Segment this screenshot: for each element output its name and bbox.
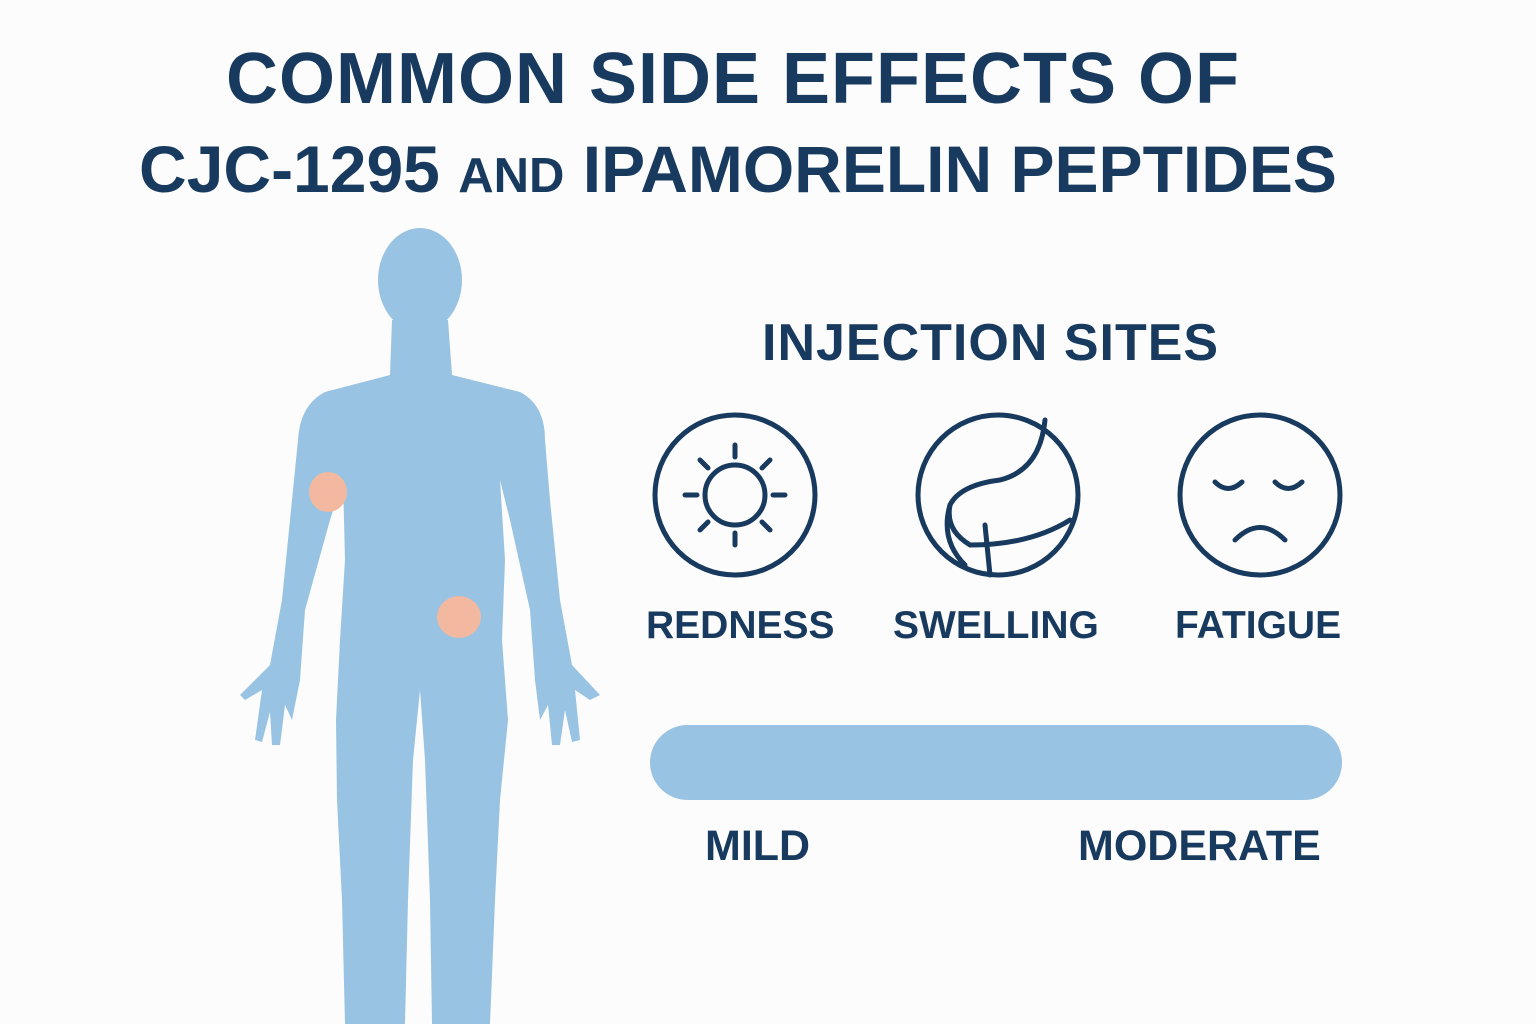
heading: injection sites: INJECTION SITES [762,314,1219,372]
icon: fatigue [1180,415,1340,575]
title [139,39,1337,206]
text: MODERATE [1078,822,1321,870]
text: SWELLING [893,604,1099,647]
icon: swelling [918,415,1078,575]
title: CJC-1295 AND IPAMORELIN PEPTIDES [139,132,1337,206]
severity bar [650,725,1342,800]
spots [309,472,481,638]
scale labels: MILD [705,822,810,870]
labels: REDNESS [646,604,835,647]
title: COMMON SIDE EFFECTS OF [226,39,1240,119]
icon: redness [655,415,815,575]
text: FATIGUE [1175,604,1341,647]
